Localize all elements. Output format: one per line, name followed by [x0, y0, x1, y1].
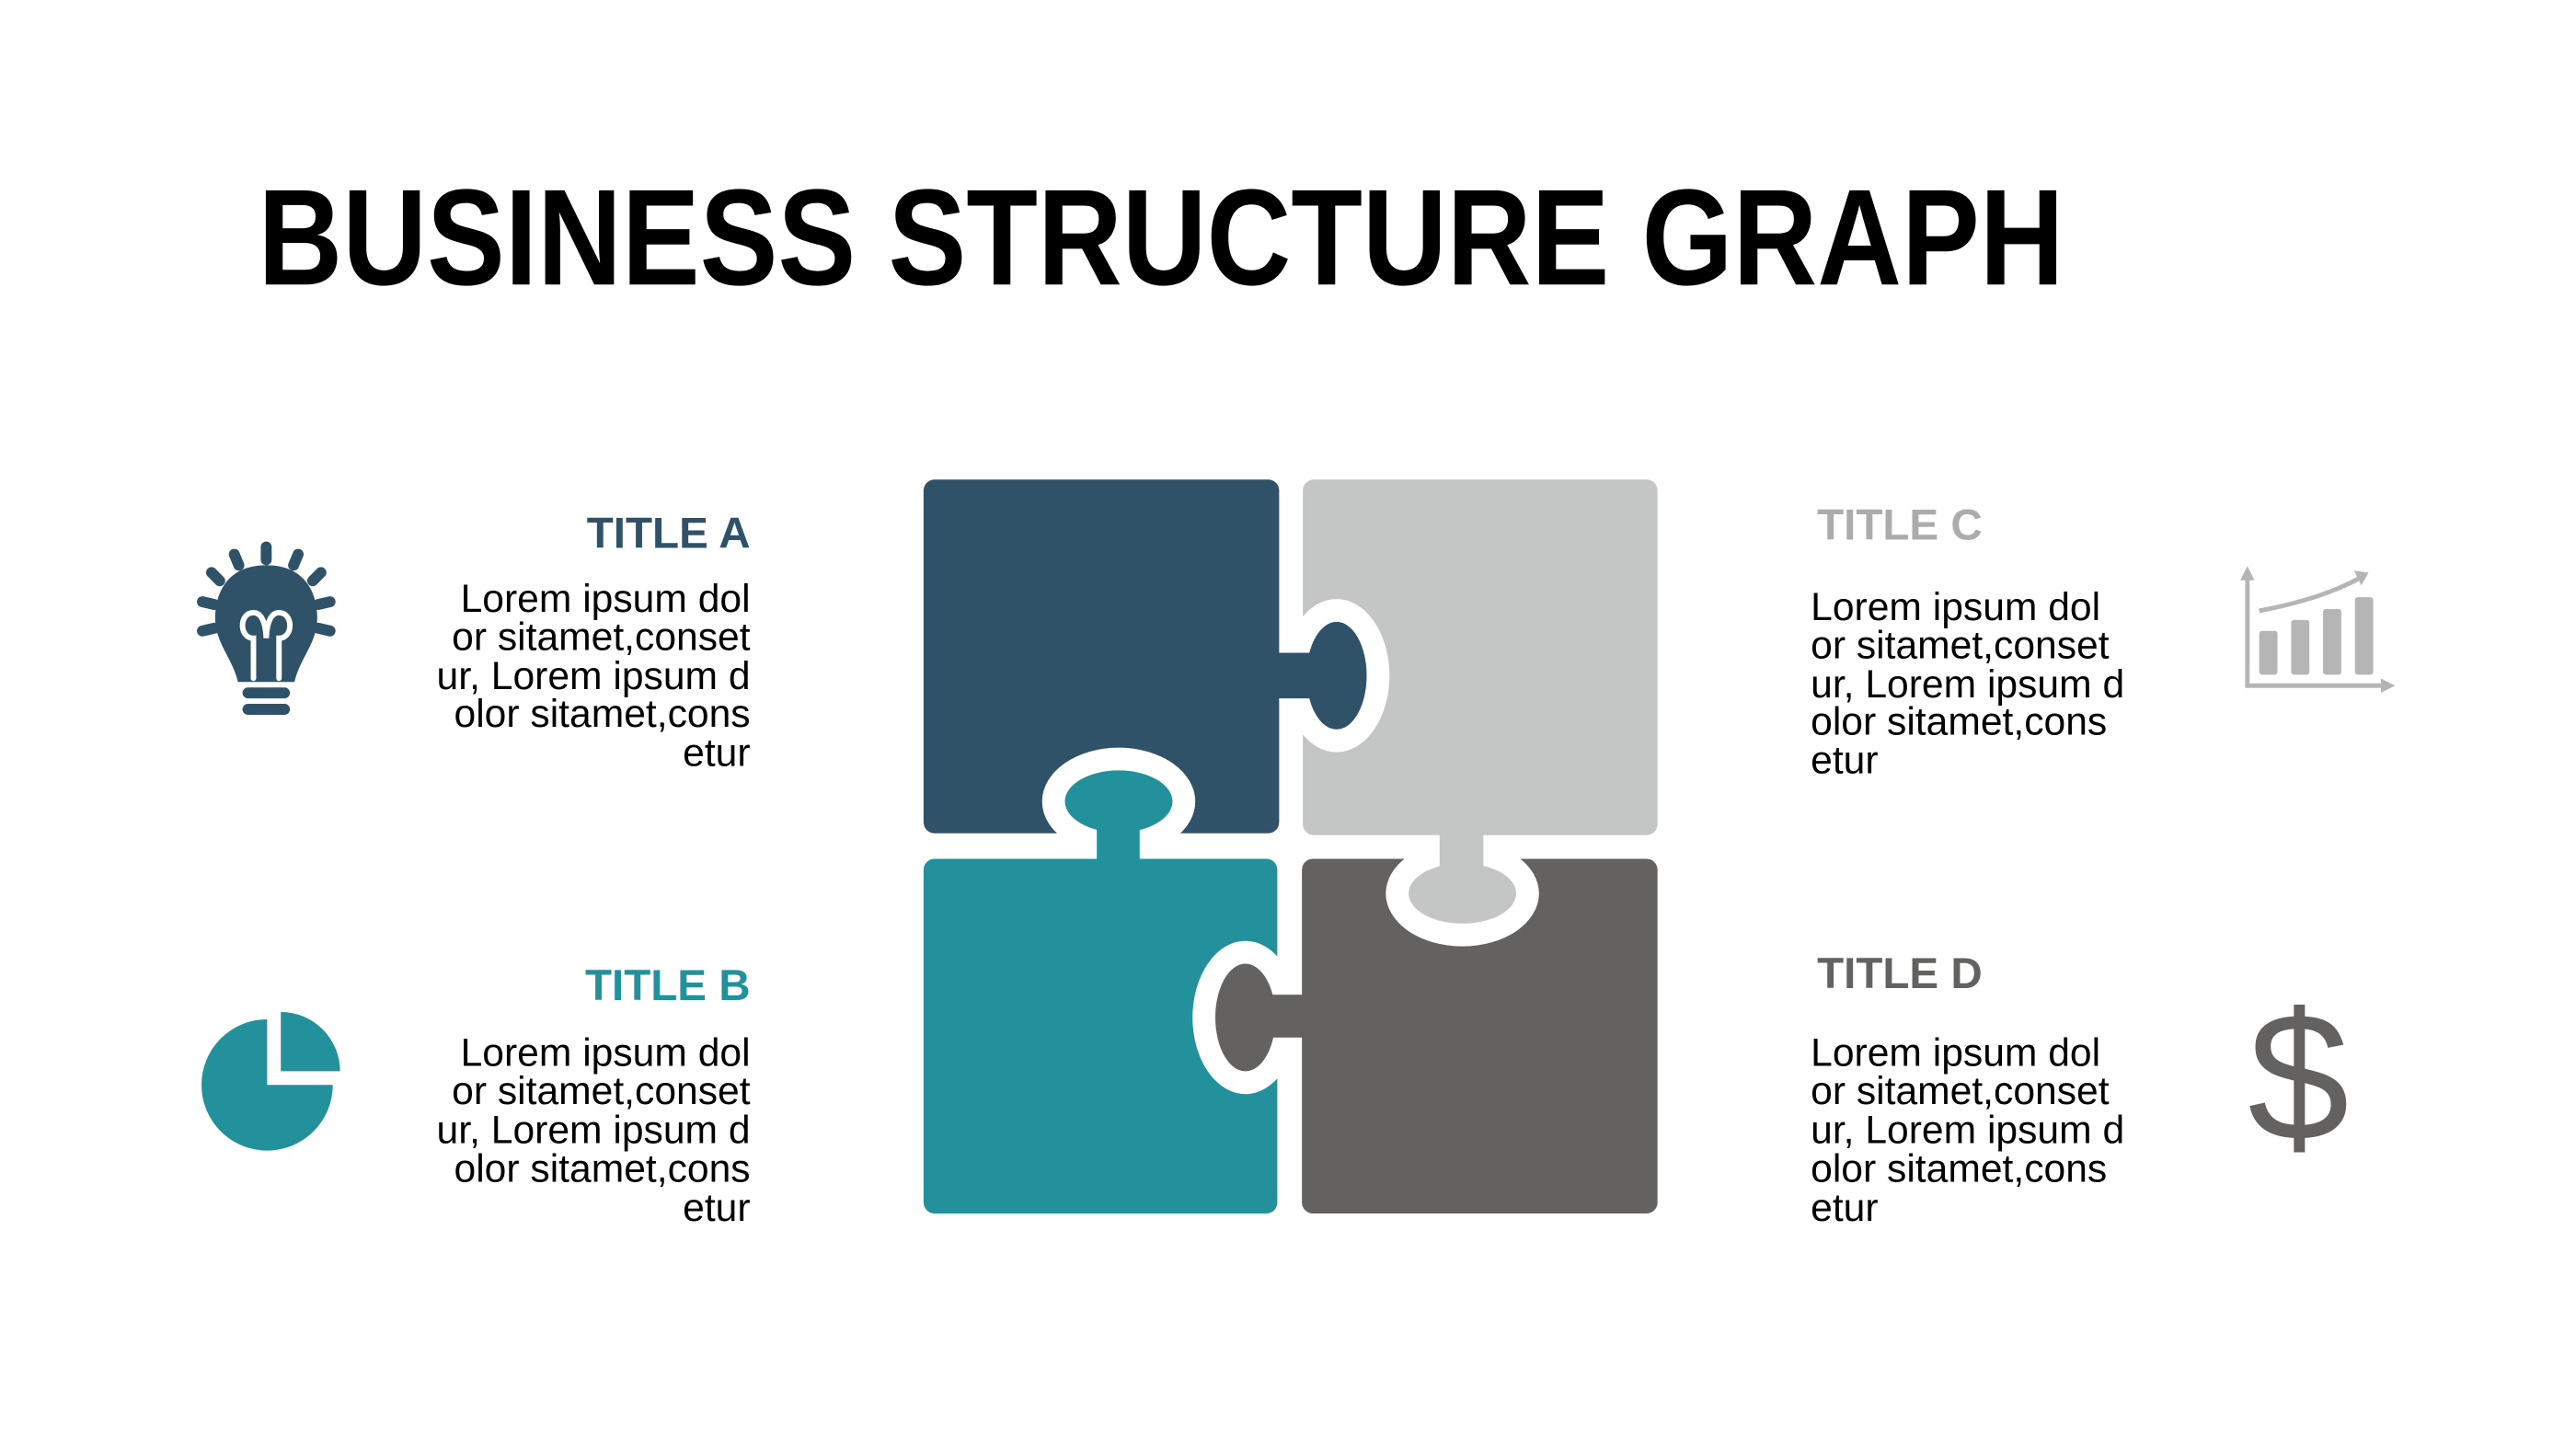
- text block C: etur: [1811, 738, 1879, 782]
- text block C: olor sitamet,cons: [1811, 700, 2107, 744]
- text block A: olor sitamet,cons: [454, 692, 751, 736]
- text block B: olor sitamet,cons: [454, 1146, 751, 1190]
- icon: bar chart: [2241, 567, 2394, 692]
- text block D: TITLE D: [1817, 949, 1983, 998]
- text block B: etur: [683, 1186, 751, 1230]
- icon: pie chart: [201, 1012, 340, 1151]
- text block C: or sitamet,conset: [1811, 624, 2110, 668]
- text block B: or sitamet,conset: [452, 1069, 751, 1113]
- text block D: or sitamet,conset: [1811, 1069, 2110, 1113]
- text block D: etur: [1811, 1186, 1879, 1230]
- text block A: TITLE A: [587, 510, 751, 558]
- text block A: Lorem ipsum dol: [461, 577, 751, 621]
- text block C: [1811, 501, 2124, 782]
- text block C: ur, Lorem ipsum d: [1811, 662, 2124, 707]
- text block B: TITLE B: [585, 961, 751, 1010]
- icon: dollar sign: $: [2248, 976, 2349, 1179]
- text block B: Lorem ipsum dol: [461, 1030, 751, 1075]
- text block A: ur, Lorem ipsum d: [437, 654, 751, 698]
- text block C: TITLE C: [1817, 501, 1983, 550]
- text block A: or sitamet,conset: [452, 615, 751, 660]
- text block B: ur, Lorem ipsum d: [437, 1109, 751, 1153]
- text block D: olor sitamet,cons: [1811, 1146, 2107, 1190]
- puzzle graphic: [924, 479, 1658, 1213]
- text block D: [1811, 949, 2124, 1230]
- title: BUSINESS STRUCTURE GRAPH: [258, 161, 2064, 314]
- text block B: [437, 961, 751, 1230]
- text block A: etur: [683, 730, 751, 775]
- text block C: Lorem ipsum dol: [1811, 585, 2100, 629]
- text block A: [437, 510, 751, 775]
- text block D: Lorem ipsum dol: [1811, 1030, 2100, 1075]
- icon: light bulb: [202, 547, 330, 715]
- text block D: ur, Lorem ipsum d: [1811, 1109, 2124, 1153]
